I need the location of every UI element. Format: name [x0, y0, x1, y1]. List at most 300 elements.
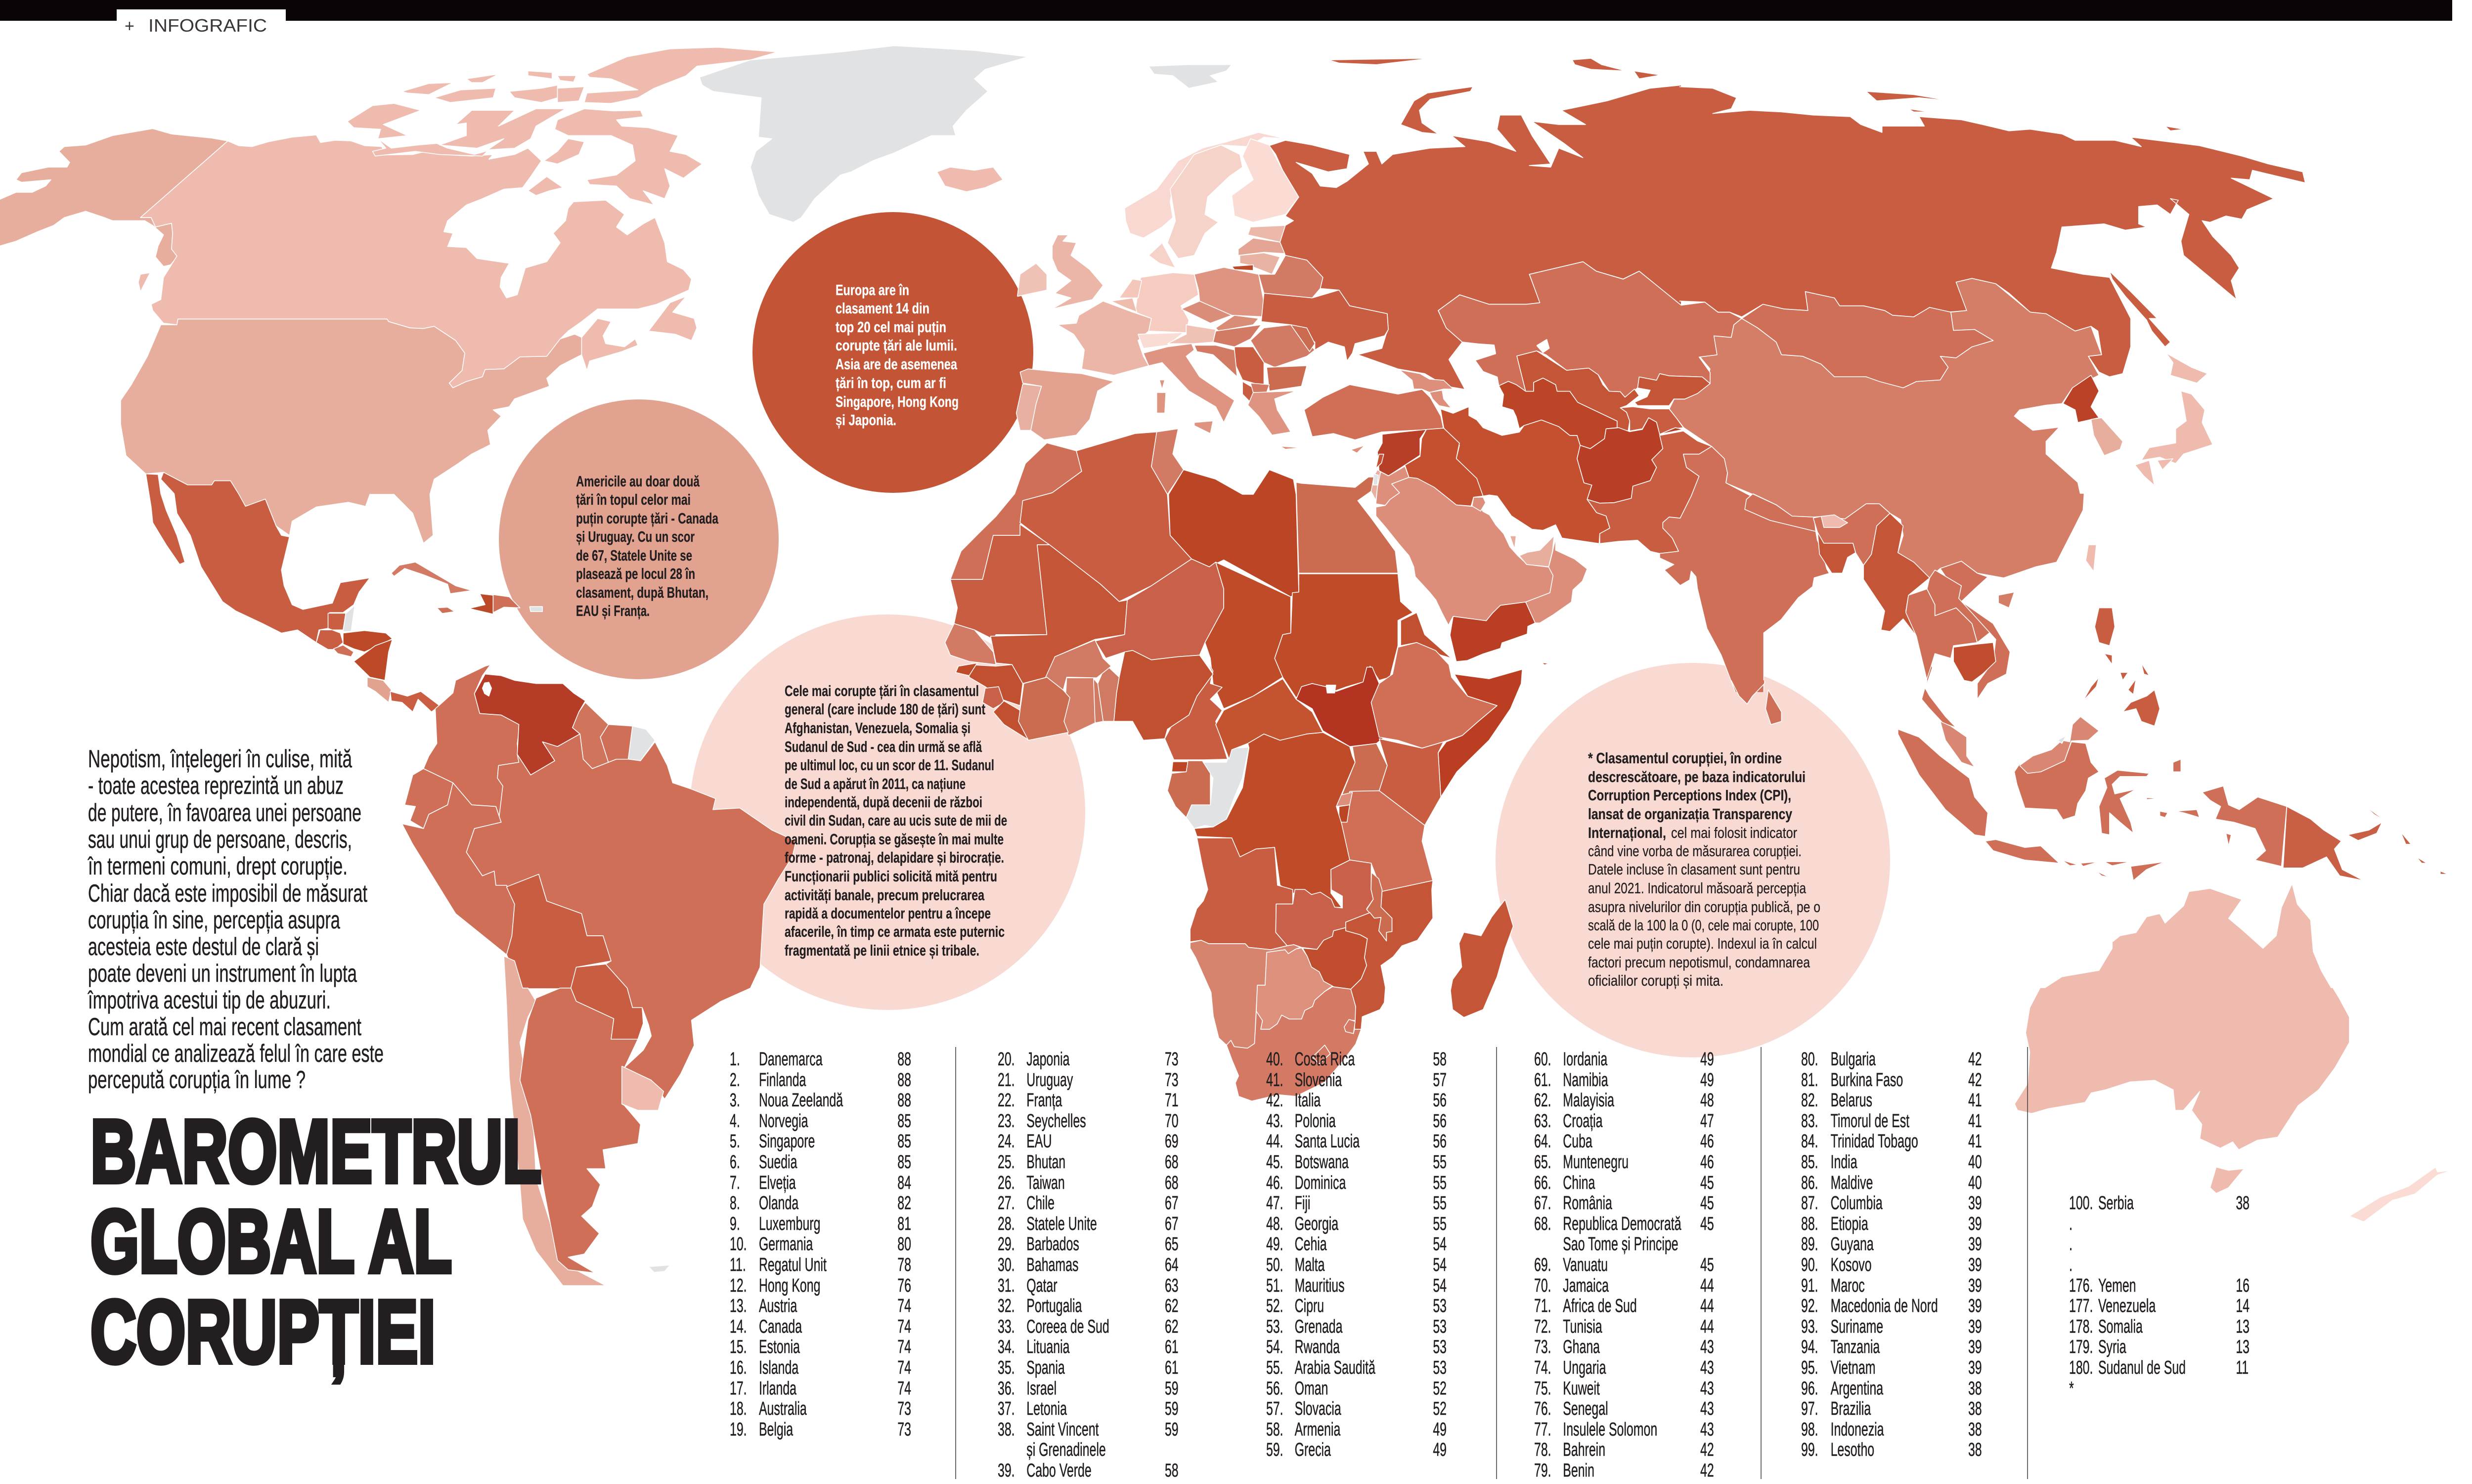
ranking column: 1-19: Finlanda	[759, 1069, 806, 1090]
callout text: methodology: cel mai folosit indicator	[1671, 824, 1797, 841]
ranking column: 60-79: 79.	[1534, 1460, 1551, 1481]
ranking column: 20-39: 32.	[998, 1295, 1015, 1316]
ranking column: 80-99: Timorul de Est	[1831, 1110, 1909, 1131]
ranking column: 40-59: Botswana	[1295, 1151, 1349, 1172]
callout text: methodology: scală de la 100 la 0 (0, cele mai corupte, 100	[1588, 917, 1819, 934]
ranking column: 80-99: 93.	[1801, 1316, 1818, 1337]
ranking column: 20-39: 73	[1165, 1069, 1179, 1090]
ranking column: 80-99: Brazilia	[1831, 1398, 1871, 1419]
ranking column: 1-19: Austria	[759, 1295, 797, 1316]
ranking column: 80-99: 98.	[1801, 1419, 1818, 1440]
ranking column: 20-39: 26.	[998, 1172, 1015, 1193]
ranking column: 40-59: 42.	[1266, 1090, 1283, 1110]
ranking column: 60-79: 44	[1700, 1316, 1714, 1337]
ranking column: 60-79: 45	[1700, 1172, 1714, 1193]
ranking column: 80-99: 85.	[1801, 1151, 1818, 1172]
ranking column: 60-79: 43	[1700, 1357, 1714, 1378]
ranking column: 80-99: 82.	[1801, 1090, 1818, 1110]
ranking column: 60-79: 60.	[1534, 1048, 1551, 1069]
callout text: Europe: Asia are de asemenea	[836, 355, 958, 373]
ranking column: 20-39: 36.	[998, 1378, 1015, 1398]
ranking column: 20-39: 59	[1165, 1419, 1179, 1440]
callout text: most corrupt countries: independentă, după decenii de război	[785, 793, 982, 811]
ranking column: 60-79: China	[1563, 1172, 1595, 1193]
intro paragraph: împotriva acestui tip de abuzuri.	[88, 986, 331, 1014]
ranking column: 80-99: 38	[1968, 1398, 1982, 1419]
callout text: Americas: clasament, după Bhutan,	[576, 584, 708, 601]
ranking column: 1-19: 73	[897, 1419, 911, 1440]
callout text: Americas: EAU și Franța.	[576, 602, 650, 619]
ranking column: 60-79: 68.	[1534, 1213, 1551, 1234]
ranking column: 40-59: Dominica	[1295, 1172, 1346, 1193]
ranking column: 80-99: 38	[1968, 1378, 1982, 1398]
ranking column: 20-39: 65	[1165, 1233, 1179, 1254]
ranking column: 80-99: 99.	[1801, 1439, 1818, 1460]
ranking column: 40-59: 53	[1433, 1295, 1447, 1316]
ranking column: 80-99: 39	[1968, 1295, 1982, 1316]
country: Somalia	[1438, 669, 1522, 797]
callout text: methodology: când vine vorba de măsurarea corupției.	[1588, 842, 1802, 860]
ranking column: 40-59: 53	[1433, 1316, 1447, 1337]
ranking column: 20-39: Letonia	[1026, 1398, 1067, 1419]
ranking column: 1-19: 74	[897, 1336, 911, 1357]
ranking column: 20-39: 70	[1165, 1110, 1179, 1131]
ranking column: 1-19: 10.	[730, 1233, 747, 1254]
ranking column: 1-19: 74	[897, 1295, 911, 1316]
ranking column: 80-99: 38	[1968, 1419, 1982, 1440]
callout text: most corrupt countries: pe ultimul loc, cu un scor de 11. Sudanul	[785, 756, 994, 774]
ranking column: 20-39: 29.	[998, 1233, 1015, 1254]
ranking column: 80-99: 95.	[1801, 1357, 1818, 1378]
ranking column: 1-19: 73	[897, 1398, 911, 1419]
ranking column: 20-39: Saint Vincent	[1026, 1419, 1099, 1440]
ranking column: 80-99: 40	[1968, 1151, 1982, 1172]
ranking column: 60-79: Iordania	[1563, 1048, 1607, 1069]
ranking column: 20-39: Spania	[1026, 1357, 1065, 1378]
ranking column: 60-79: 74.	[1534, 1357, 1551, 1378]
ranking column: 80-99: 42	[1968, 1048, 1982, 1069]
ranking column: 60-79: Africa de Sud	[1563, 1295, 1637, 1316]
ranking column: 1-19: 5.	[730, 1131, 740, 1151]
ranking column: 20-39: 25.	[998, 1151, 1015, 1172]
map: South America north	[402, 664, 796, 1099]
ranking column: 80-99: Lesotho	[1831, 1439, 1874, 1460]
ranking column: 1-19: 15.	[730, 1336, 747, 1357]
ranking column: 60-79: Insulele Solomon	[1563, 1419, 1657, 1440]
intro paragraph	[88, 745, 384, 1093]
callout text: most corrupt countries: Afghanistan, Venezuela, Somalia și	[785, 719, 971, 737]
intro paragraph: acesteia este destul de clară și	[88, 933, 319, 960]
ranking column: 40-59: 53	[1433, 1336, 1447, 1357]
ranking column: 20-39: 67	[1165, 1192, 1179, 1213]
callout text: Europe	[836, 281, 959, 429]
callout text: Europe: clasament 14 din	[836, 300, 929, 317]
ranking column: 100 and 176-180: .	[2069, 1233, 2073, 1254]
ranking column: 1-19: 11.	[730, 1254, 746, 1275]
ranking column: 80-99	[1801, 1048, 1982, 1460]
ranking column: 80-99: Guyana	[1831, 1233, 1874, 1254]
map: Middle East, Central and South Asia	[1351, 262, 1829, 692]
callout text: most corrupt countries: civil din Sudan, care au ucis sute de mii de	[785, 812, 1007, 829]
country: Australia north	[2043, 884, 2332, 989]
ranking column: 100 and 176-180: Venezuela	[2098, 1295, 2156, 1316]
callout text: methodology: Datele incluse în clasament sunt pentru	[1588, 861, 1800, 878]
ranking column: 40-59: Oman	[1295, 1378, 1328, 1398]
circle: Europe callout background	[752, 212, 1033, 493]
ranking column: 1-19: Noua Zeelandă	[759, 1090, 843, 1110]
ranking column: 20-39: 27.	[998, 1192, 1015, 1213]
ranking column: 1-19: 88	[897, 1090, 911, 1110]
circle: Americas callout background	[499, 399, 779, 679]
ranking column: 60-79: 67.	[1534, 1192, 1551, 1213]
ranking column: 1-19: 74	[897, 1316, 911, 1337]
ranking column: 80-99: 39	[1968, 1233, 1982, 1254]
ranking column: 100 and 176-180: Somalia	[2098, 1316, 2143, 1337]
ranking column: 60-79: 69.	[1534, 1254, 1551, 1275]
ranking column: 80-99: 42	[1968, 1069, 1982, 1090]
ranking column: 80-99: 83.	[1801, 1110, 1818, 1131]
ranking column: 40-59: 52	[1433, 1398, 1447, 1419]
callout text: most corrupt countries: activități banale, precum prelucrarea	[785, 886, 985, 904]
callout text: Europe: Europa are în	[836, 281, 909, 299]
ranking column: 20-39: 58	[1165, 1460, 1179, 1481]
ranking column: 20-39: 67	[1165, 1213, 1179, 1234]
ranking column: 1-19: 76	[897, 1275, 911, 1296]
ranking column: 20-39: Bhutan	[1026, 1151, 1065, 1172]
ranking column: 1-19: Singapore	[759, 1131, 815, 1151]
ranking column: 100 and 176-180: 14	[2236, 1295, 2250, 1316]
ranking column: 20-39: Lituania	[1026, 1336, 1070, 1357]
map: South America south	[504, 956, 670, 1286]
ranking column: 20-39: Bahamas	[1026, 1254, 1078, 1275]
ranking column: 100 and 176-180: 13	[2236, 1336, 2250, 1357]
ranking column: 20-39: 69	[1165, 1131, 1179, 1151]
ranking column: 60-79: 49	[1700, 1048, 1714, 1069]
ranking column: 1-19: 19.	[730, 1419, 747, 1440]
ranking column: 1-19: 80	[897, 1233, 911, 1254]
ranking column: 20-39: Statele Unite	[1026, 1213, 1097, 1234]
ranking column: 20-39: Uruguay	[1026, 1069, 1073, 1090]
ranking column: 20-39: Cabo Verde	[1026, 1460, 1092, 1481]
ranking column: 80-99: 40	[1968, 1172, 1982, 1193]
ranking column: 1-19: 74	[897, 1378, 911, 1398]
ranking column: 20-39: Franța	[1026, 1090, 1062, 1110]
ranking column: 20-39: 23.	[998, 1110, 1015, 1131]
ranking column: 80-99: 41	[1968, 1131, 1982, 1151]
ranking column: 60-79: Sao Tome și Principe	[1563, 1233, 1678, 1254]
ranking column: 40-59: 49.	[1266, 1233, 1283, 1254]
ranking column: 40-59: 49	[1433, 1439, 1447, 1460]
ranking column: 1-19: 85	[897, 1151, 911, 1172]
ranking column: 40-59: 58	[1433, 1048, 1447, 1069]
ranking column: 100 and 176-180: 16	[2236, 1275, 2250, 1296]
ranking column: 1-19: 78	[897, 1254, 911, 1275]
ranking column: 1-19: 84	[897, 1172, 911, 1193]
ranking column: 40-59: Malta	[1295, 1254, 1325, 1275]
ranking column: 60-79: 43	[1700, 1419, 1714, 1440]
ranking column: 40-59: 53.	[1266, 1316, 1283, 1337]
ranking column: 80-99: Indonezia	[1831, 1419, 1884, 1440]
ranking column: 80-99: 88.	[1801, 1213, 1818, 1234]
callout text: methodology: oficialilor corupți și mita.	[1588, 972, 1723, 989]
callout text: methodology: Internațional,	[1588, 824, 1666, 841]
ranking column: 80-99: 91.	[1801, 1275, 1818, 1296]
ranking column: 60-79: Republica Democrată	[1563, 1213, 1681, 1234]
ranking column: 20-39: 59	[1165, 1398, 1179, 1419]
ranking column: 40-59: 51.	[1266, 1275, 1283, 1296]
map: Africa	[945, 429, 1522, 1017]
ranking column: 40-59: 41.	[1266, 1069, 1283, 1090]
ranking column: 1-19: Luxemburg	[759, 1213, 820, 1234]
ranking column: 80-99: Vietnam	[1831, 1357, 1875, 1378]
ranking column: 20-39: EAU	[1026, 1131, 1052, 1151]
ranking column: 40-59: 56	[1433, 1090, 1447, 1110]
ranking column: 40-59: 49	[1433, 1419, 1447, 1440]
ranking column: 60-79: 43	[1700, 1378, 1714, 1398]
ranking column: 60-79: 78.	[1534, 1439, 1551, 1460]
ranking column: 20-39: 62	[1165, 1316, 1179, 1337]
ranking column: 20-39: 21.	[998, 1069, 1015, 1090]
ranking column: 1-19: 2.	[730, 1069, 740, 1090]
ranking column: 1-19: Islanda	[759, 1357, 798, 1378]
ranking column: 40-59: 45.	[1266, 1151, 1283, 1172]
ranking column: 60-79: 46	[1700, 1131, 1714, 1151]
ranking column: 20-39: Taiwan	[1026, 1172, 1065, 1193]
ranking column: 20-39: 30.	[998, 1254, 1015, 1275]
ranking column: 1-19: 7.	[730, 1172, 740, 1193]
callout text: most corrupt countries: general (care include 180 de țări) sunt	[785, 700, 985, 718]
ranking column: 80-99: 39	[1968, 1275, 1982, 1296]
ranking column: 20-39: 24.	[998, 1131, 1015, 1151]
ranking column: 20-39: 28.	[998, 1213, 1015, 1234]
ranking column: 80-99: 39	[1968, 1213, 1982, 1234]
ranking column: 80-99: 87.	[1801, 1192, 1818, 1213]
ranking column: 60-79: Cuba	[1563, 1131, 1592, 1151]
top black bar	[0, 0, 2452, 21]
ranking column: 1-19: 17.	[730, 1378, 747, 1398]
ranking column: 40-59: 55	[1433, 1172, 1447, 1193]
callout text: Europe: și Japonia.	[836, 411, 896, 429]
ranking column: 40-59: 48.	[1266, 1213, 1283, 1234]
ranking column: 60-79: 64.	[1534, 1131, 1551, 1151]
ranking column: 80-99: 81.	[1801, 1069, 1818, 1090]
ranking column: 40-59: 52	[1433, 1378, 1447, 1398]
callout text: most corrupt countries: fragmentată pe linii etnice și tribale.	[785, 942, 979, 959]
ranking column: 40-59: Arabia Saudită	[1295, 1357, 1375, 1378]
ranking column: 1-19: 8.	[730, 1192, 740, 1213]
ranking column: 20-39: Japonia	[1026, 1048, 1070, 1069]
ranking column: 100 and 176-180: Yemen	[2098, 1275, 2136, 1296]
ranking column: 100 and 176-180: *	[2069, 1378, 2074, 1398]
ranking column: 1-19: 85	[897, 1110, 911, 1131]
ranking column: 20-39: 37.	[998, 1398, 1015, 1419]
ranking column: 40-59: Armenia	[1295, 1419, 1340, 1440]
ranking column: 20-39: și Grenadinele	[1026, 1439, 1106, 1460]
ranking column: 100 and 176-180: Sudanul de Sud	[2098, 1357, 2186, 1378]
ranking column: 1-19: 82	[897, 1192, 911, 1213]
ranking column: 1-19: 13.	[730, 1295, 747, 1316]
intro paragraph: - toate acestea reprezintă un abuz	[88, 772, 344, 799]
ranking column: 40-59: 57.	[1266, 1398, 1283, 1419]
ranking column: 1-19: Suedia	[759, 1151, 797, 1172]
ranking column: 40-59: 54	[1433, 1233, 1447, 1254]
column separators	[956, 1047, 2028, 1479]
ranking column: 20-39: 71	[1165, 1090, 1179, 1110]
ranking column: 20-39: Portugalia	[1026, 1295, 1082, 1316]
intro paragraph: de putere, în favoarea unei persoane	[88, 799, 361, 827]
ranking column: 40-59: Santa Lucia	[1295, 1131, 1360, 1151]
ranking column: 60-79: Benin	[1563, 1460, 1594, 1481]
ranking column: 20-39: 35.	[998, 1357, 1015, 1378]
callout text: Americas: și Uruguay. Cu un scor	[576, 528, 695, 545]
ranking column: 1-19: Regatul Unit	[759, 1254, 827, 1275]
ranking column: 80-99: Macedonia de Nord	[1831, 1295, 1938, 1316]
ranking column: 80-99: 92.	[1801, 1295, 1818, 1316]
map: Russia east, China, Mongolia, Japan	[1669, 87, 2305, 494]
ranking column: 80-99: India	[1831, 1151, 1857, 1172]
ranking column: 40-59: Grecia	[1295, 1439, 1331, 1460]
callout text: methodology: descrescătoare, pe baza indicatorului	[1588, 768, 1806, 786]
ranking column: 40-59: Cehia	[1295, 1233, 1327, 1254]
ranking column: 40-59: 59.	[1266, 1439, 1283, 1460]
intro paragraph: sau unui grup de persoane, descris,	[88, 826, 352, 853]
callout text: most corrupt countries: rapidă a documentelor pentru a începe	[785, 905, 991, 922]
title: CORUPȚIEI	[90, 1282, 436, 1382]
callout text: most corrupt countries: afacerile, în timp ce armata este puternic	[785, 923, 1005, 940]
ranking column: 60-79: 72.	[1534, 1316, 1551, 1337]
section tab: infografic	[117, 9, 286, 36]
ranking column: 20-39: 33.	[998, 1316, 1015, 1337]
section tab: infografic: INFOGRAFIC	[148, 15, 267, 36]
callout text: Americas: țări în topul celor mai	[576, 491, 691, 508]
callout text: most corrupt countries	[785, 682, 1007, 959]
ranking column: 40-59: 40.	[1266, 1048, 1283, 1069]
callout text: methodology: factori precum nepotismul, condamnarea	[1588, 954, 1810, 971]
ranking column: 40-59: 46.	[1266, 1172, 1283, 1193]
ranking column: 60-79: 73.	[1534, 1336, 1551, 1357]
circle: most corrupt callout background	[690, 614, 1085, 1010]
ranking column: 80-99: 39	[1968, 1357, 1982, 1378]
ranking column: 60-79: 48	[1700, 1090, 1714, 1110]
ranking column: 80-99: Argentina	[1831, 1378, 1883, 1398]
ranking column: 100 and 176-180: 11	[2236, 1357, 2249, 1378]
ranking column: 80-99: Columbia	[1831, 1192, 1883, 1213]
ranking column: 60-79: 42	[1700, 1439, 1714, 1460]
ranking column: 40-59: Georgia	[1295, 1213, 1338, 1234]
callout text: most corrupt countries: Funcționarii publici solicită mită pentru	[785, 868, 997, 885]
ranking column: 40-59: Costa Rica	[1295, 1048, 1355, 1069]
ranking column: 40-59: 44.	[1266, 1131, 1283, 1151]
callout text: Americas	[576, 473, 719, 619]
callout text: Americas: plasează pe locul 28 în	[576, 565, 695, 582]
ranking column: 20-39: Barbados	[1026, 1233, 1079, 1254]
ranking column: 60-79: Senegal	[1563, 1398, 1608, 1419]
ranking column: 60-79: 42	[1700, 1460, 1714, 1481]
ranking column: 60-79: 70.	[1534, 1275, 1551, 1296]
ranking column: 60-79: 44	[1700, 1275, 1714, 1296]
ranking column: 20-39: 38.	[998, 1419, 1015, 1440]
country: China north	[1669, 278, 2102, 494]
callout text: methodology: cele mai puțin corupte). Indexul ia în calcul	[1588, 935, 1817, 952]
country: Yemen	[1450, 602, 1535, 661]
ranking column: 100 and 176-180: .	[2069, 1213, 2073, 1234]
country: Saudi Arabia	[1376, 478, 1553, 625]
ranking column: 1-19: 12.	[730, 1275, 747, 1296]
ranking column: 20-39: 22.	[998, 1090, 1015, 1110]
ranking column: 100 and 176-180: 178.	[2069, 1316, 2093, 1337]
ranking column: 60-79: 61.	[1534, 1069, 1551, 1090]
ranking column: 80-99: Belarus	[1831, 1090, 1872, 1110]
ranking column: 1-19: Norvegia	[759, 1110, 808, 1131]
ranking column: 40-59: 47.	[1266, 1192, 1283, 1213]
ranking column: 100 and 176-180	[2069, 1192, 2250, 1398]
ranking column: 1-19: Irlanda	[759, 1378, 796, 1398]
ranking column: 40-59: 54	[1433, 1275, 1447, 1296]
map: southern Africa	[1190, 838, 1433, 1101]
ranking column: 40-59: Slovenia	[1295, 1069, 1342, 1090]
ranking column: 40-59	[1266, 1048, 1447, 1460]
ranking column: 20-39: Seychelles	[1026, 1110, 1086, 1131]
ranking column: 40-59: 56	[1433, 1131, 1447, 1151]
ranking column: 1-19: 6.	[730, 1151, 740, 1172]
callout text: methodology	[1588, 749, 1820, 989]
ranking column: 40-59: Polonia	[1295, 1110, 1336, 1131]
ranking column: 80-99: 96.	[1801, 1378, 1818, 1398]
ranking column: 60-79: Bahrein	[1563, 1439, 1605, 1460]
ranking column: 60-79: Malayisia	[1563, 1090, 1614, 1110]
ranking column: 60-79: 47	[1700, 1110, 1714, 1131]
ranking column: 40-59: Mauritius	[1295, 1275, 1345, 1296]
title	[90, 1102, 541, 1382]
ranking column: 40-59: Slovacia	[1295, 1398, 1341, 1419]
ranking column: 80-99: 97.	[1801, 1398, 1818, 1419]
ranking column: 100 and 176-180: 38	[2236, 1192, 2250, 1213]
ranking column: 60-79: Namibia	[1563, 1069, 1608, 1090]
ranking column: 20-39: 31.	[998, 1275, 1015, 1296]
ranking column: 1-19: 3.	[730, 1090, 740, 1110]
ranking column: 80-99: 41	[1968, 1090, 1982, 1110]
ranking column: 100 and 176-180: 100.	[2069, 1192, 2093, 1213]
ranking column: 40-59: 55	[1433, 1213, 1447, 1234]
ranking column: 80-99: 89.	[1801, 1233, 1818, 1254]
ranking column: 1-19: Australia	[759, 1398, 807, 1419]
callout text: methodology: asupra nivelurilor din corupția publică, pe o	[1588, 898, 1820, 916]
ranking column: 60-79: România	[1563, 1192, 1612, 1213]
ranking column: 1-19: Germania	[759, 1233, 813, 1254]
callout text: most corrupt countries: de Sud a apărut în 2011, ca națiune	[785, 775, 966, 792]
ranking column: 60-79: 63.	[1534, 1110, 1551, 1131]
intro paragraph: în termeni comuni, drept corupție.	[88, 852, 348, 880]
ranking column: 100 and 176-180: Serbia	[2098, 1192, 2134, 1213]
ranking column: 80-99: Maldive	[1831, 1172, 1873, 1193]
ranking column: 40-59: 58.	[1266, 1419, 1283, 1440]
ranking column: 1-19: 88	[897, 1069, 911, 1090]
ranking column: 60-79: Kuweit	[1563, 1378, 1600, 1398]
ranking column: 40-59: Cipru	[1295, 1295, 1324, 1316]
section tab: infografic: +	[125, 17, 134, 36]
callout text: methodology: Corruption Perceptions Index (CPI),	[1588, 786, 1791, 804]
ranking column: 20-39: 63	[1165, 1275, 1179, 1296]
country: United States	[121, 319, 581, 543]
ranking column: 80-99: Trinidad Tobago	[1831, 1131, 1918, 1151]
ranking column: 20-39	[998, 1048, 1179, 1481]
ranking column: 80-99: 84.	[1801, 1131, 1818, 1151]
ranking column: 100 and 176-180: 13	[2236, 1316, 2250, 1337]
ranking column: 1-19: 9.	[730, 1213, 740, 1234]
callout text: most corrupt countries: Cele mai corupte țări în clasamentul	[785, 682, 979, 699]
ranking column: 1-19: Elveția	[759, 1172, 796, 1193]
country: India	[1660, 446, 1829, 692]
